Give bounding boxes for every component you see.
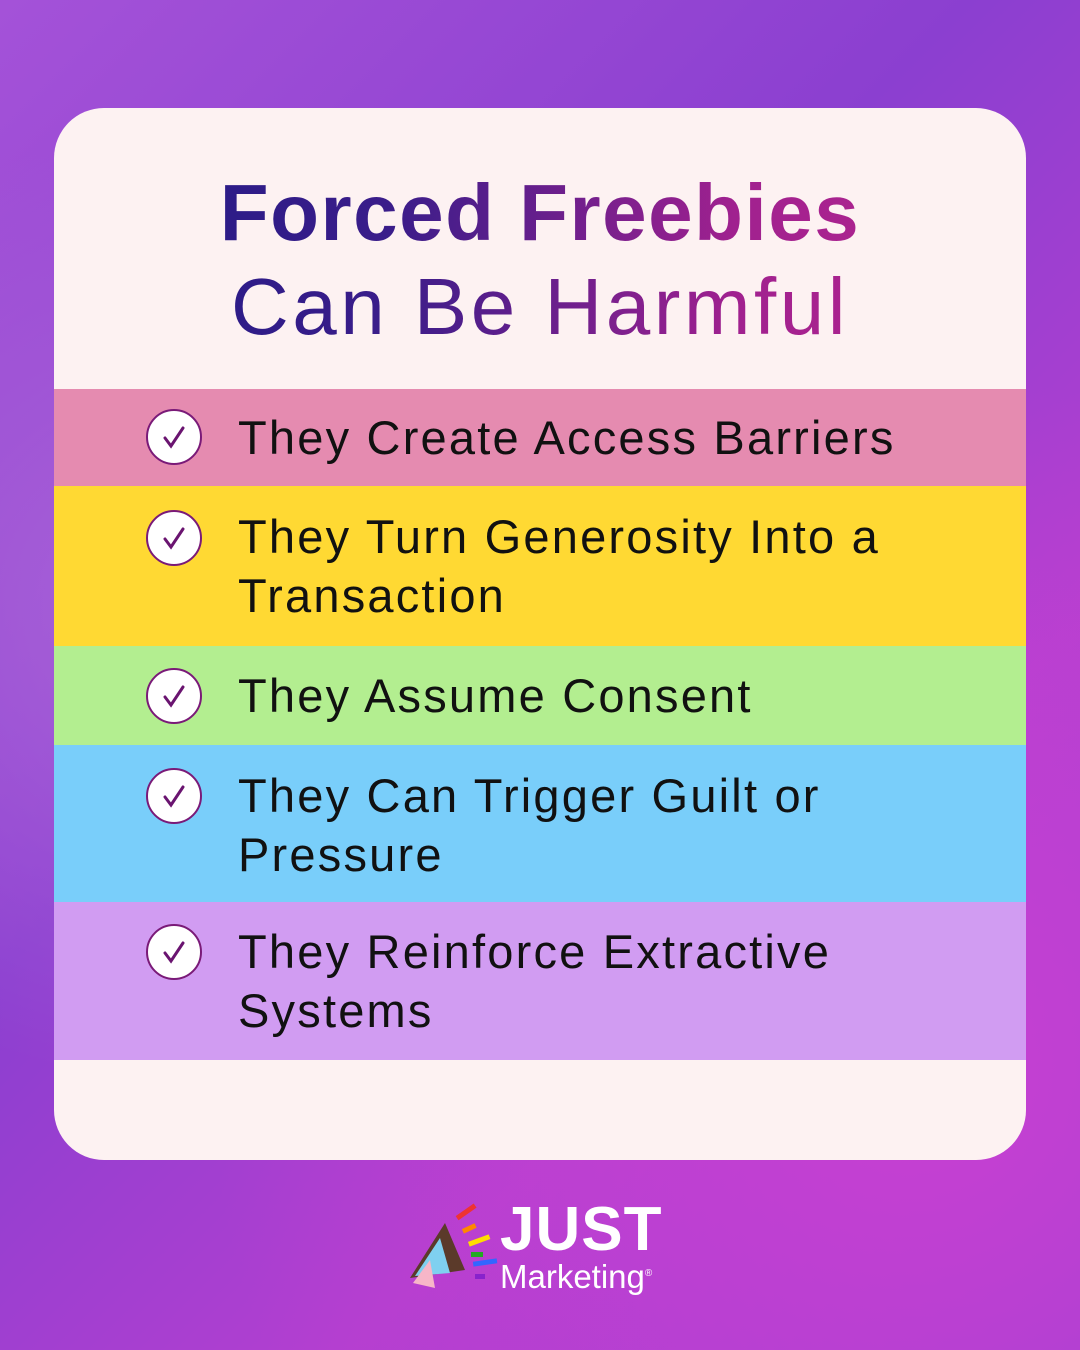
title bbox=[220, 168, 860, 351]
logo: Marketing® bbox=[500, 1258, 652, 1295]
logo text: JUST bbox=[500, 1195, 662, 1264]
title: Can Be Harmful bbox=[231, 262, 849, 351]
row: generosity: Transaction bbox=[238, 569, 506, 622]
logo bbox=[410, 1195, 662, 1295]
row: generosity: They Turn Generosity Into a bbox=[238, 510, 880, 563]
card bbox=[54, 108, 1026, 1160]
title: Forced Freebies bbox=[220, 168, 860, 257]
row: consent: They Assume Consent bbox=[238, 669, 753, 722]
row: guilt: They Can Trigger Guilt or bbox=[238, 769, 821, 822]
row: guilt bbox=[54, 745, 1026, 902]
row: extractive: They Reinforce Extractive bbox=[238, 925, 831, 978]
row: generosity bbox=[54, 486, 1026, 646]
row: extractive: Systems bbox=[238, 984, 434, 1037]
row: access barriers: They Create Access Barriers bbox=[238, 411, 896, 464]
icon: megaphone bbox=[410, 1204, 498, 1288]
row: guilt: Pressure bbox=[238, 828, 444, 881]
row: extractive bbox=[54, 902, 1026, 1060]
row: access barriers bbox=[54, 389, 1026, 486]
row: consent bbox=[54, 646, 1026, 745]
